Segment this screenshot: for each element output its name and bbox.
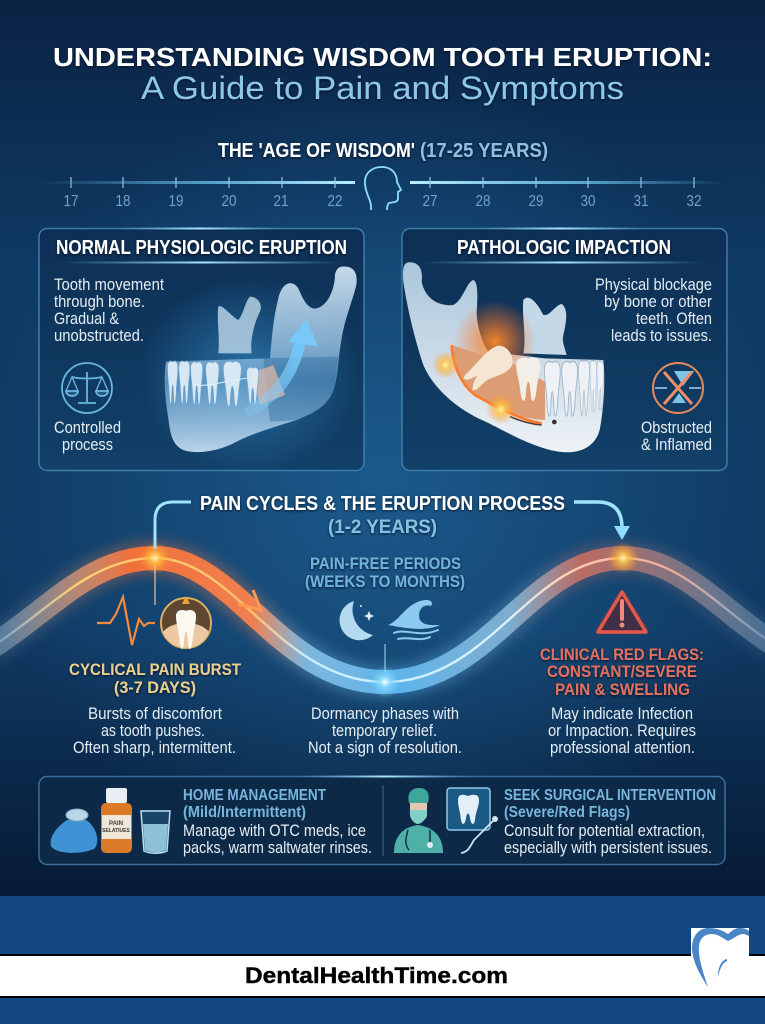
- text block: May indicate Infection: [551, 704, 693, 723]
- text block: teeth. Often: [636, 309, 712, 328]
- text block: Often sharp, intermittent.: [73, 738, 236, 757]
- text block: by bone or other: [604, 292, 712, 311]
- title: [53, 42, 712, 106]
- pain cycles heading: (1-2 YEARS): [328, 517, 437, 538]
- icon: tooth in gum: [161, 596, 211, 649]
- timeline heading: THE 'AGE OF WISDOM': [218, 139, 415, 162]
- surgical intervention text: (Severe/Red Flags): [504, 804, 630, 821]
- surgical intervention text: SEEK SURGICAL INTERVENTION: [504, 787, 716, 804]
- arrow: heading to burst: [155, 502, 191, 605]
- text block: [73, 704, 236, 757]
- age timeline: 28: [476, 193, 491, 210]
- age timeline: 29: [528, 193, 544, 210]
- text block: as tooth pushes.: [101, 721, 205, 740]
- age timeline: 21: [274, 193, 289, 210]
- icon: surgeon: [394, 788, 443, 853]
- text block: [308, 704, 462, 757]
- text block: professional attention.: [550, 738, 695, 757]
- arrowhead on burst: [238, 590, 261, 610]
- timeline heading: (17-25 YEARS): [420, 139, 548, 162]
- jaw illustration: [140, 266, 360, 475]
- heading: PAIN & SWELLING: [555, 680, 690, 699]
- home management text: [183, 787, 372, 857]
- icon: medicine bottle: [101, 788, 132, 853]
- clinical red flags: [540, 592, 704, 757]
- panel: normal physiologic eruption: [39, 228, 364, 475]
- pain-free periods: [305, 554, 465, 757]
- home management text: HOME MANAGEMENT: [183, 787, 326, 804]
- text block: leads to issues.: [611, 326, 712, 345]
- caption: process: [62, 435, 113, 454]
- logo: tooth: [691, 928, 749, 987]
- age timeline: 17: [64, 193, 79, 210]
- icon: ice pack: [51, 809, 97, 853]
- text block: Physical blockage: [595, 275, 712, 294]
- heading: (3-7 DAYS): [114, 678, 196, 697]
- home management text: packs, warm saltwater rinses.: [183, 838, 372, 857]
- pain cycles heading: PAIN CYCLES & THE ERUPTION PROCESS: [200, 493, 565, 515]
- surgical intervention text: especially with persistent issues.: [504, 838, 712, 857]
- icon: glass of water: [141, 811, 170, 853]
- text block: Not a sign of resolution.: [308, 738, 462, 757]
- heading: CONSTANT/SEVERE: [547, 662, 697, 681]
- age timeline: 20: [222, 193, 237, 210]
- text block: Tooth movement: [54, 275, 164, 294]
- heading: [69, 660, 242, 697]
- icon: dental x-ray: [447, 788, 490, 830]
- age timeline: 18: [116, 193, 131, 210]
- heading: CYCLICAL PAIN BURST: [69, 660, 242, 679]
- age timeline: [40, 167, 725, 210]
- heading: CLINICAL RED FLAGS:: [540, 645, 704, 664]
- website name: DentalHealthTime.com: [245, 963, 508, 988]
- heading: PAIN-FREE PERIODS: [310, 554, 461, 573]
- age timeline: 22: [328, 193, 343, 210]
- cyclical pain burst: [69, 596, 242, 757]
- text block: Bursts of discomfort: [88, 704, 222, 723]
- arrow: heading to red flags: [574, 502, 630, 540]
- icon: medicine bottle: SELATIUES: [102, 828, 131, 834]
- heading: NORMAL PHYSIOLOGIC ERUPTION: [56, 237, 347, 259]
- home management text: Manage with OTC meds, ice: [183, 821, 366, 840]
- surgical intervention text: [504, 787, 716, 857]
- age timeline: 19: [168, 193, 184, 210]
- text block: [548, 704, 696, 757]
- text block: temporary relief.: [332, 721, 437, 740]
- icon: moon and star: [340, 601, 374, 640]
- text block: or Impaction. Requires: [548, 721, 696, 740]
- footer band: [0, 896, 765, 1024]
- age timeline: 27: [422, 193, 438, 210]
- jaw illustration: [403, 262, 604, 452]
- caption: Obstructed: [641, 418, 712, 437]
- heading: (WEEKS TO MONTHS): [305, 572, 465, 591]
- icon: wave: [388, 600, 440, 639]
- home management text: (Mild/Intermittent): [183, 804, 306, 821]
- caption: & Inflamed: [641, 435, 712, 454]
- text block: Gradual &: [54, 309, 120, 328]
- text block: [54, 275, 164, 345]
- icon: obstructed cross: [653, 363, 703, 413]
- text block: unobstructed.: [54, 326, 144, 345]
- heading: PATHOLOGIC IMPACTION: [457, 237, 671, 259]
- icon: warning triangle: [596, 592, 648, 632]
- caption: Controlled: [54, 418, 121, 437]
- age timeline: 30: [580, 193, 596, 210]
- icon: head profile: [365, 167, 401, 210]
- pain cycle wave: [0, 542, 765, 698]
- panel: care options: [39, 776, 725, 864]
- surgical intervention text: Consult for potential extraction,: [504, 821, 705, 840]
- text block: [595, 275, 712, 345]
- age timeline: 31: [634, 193, 649, 210]
- title: UNDERSTANDING WISDOM TOOTH ERUPTION:: [53, 42, 712, 72]
- text block: Dormancy phases with: [311, 704, 459, 723]
- panel: pathologic impaction: [402, 228, 727, 470]
- icon: medicine bottle: PAIN: [109, 821, 123, 827]
- caption: [641, 418, 712, 454]
- timeline heading: [218, 139, 548, 162]
- title: A Guide to Pain and Symptoms: [141, 70, 624, 106]
- icon: balance scales: [62, 363, 112, 413]
- caption: [54, 418, 121, 454]
- heading: [305, 554, 465, 591]
- pain cycles heading: [200, 493, 565, 538]
- icon: dental mirror: [461, 816, 498, 853]
- heading: [540, 645, 704, 699]
- icon: pulse line: [97, 597, 155, 645]
- age timeline: 32: [686, 193, 702, 210]
- text block: through bone.: [54, 292, 145, 311]
